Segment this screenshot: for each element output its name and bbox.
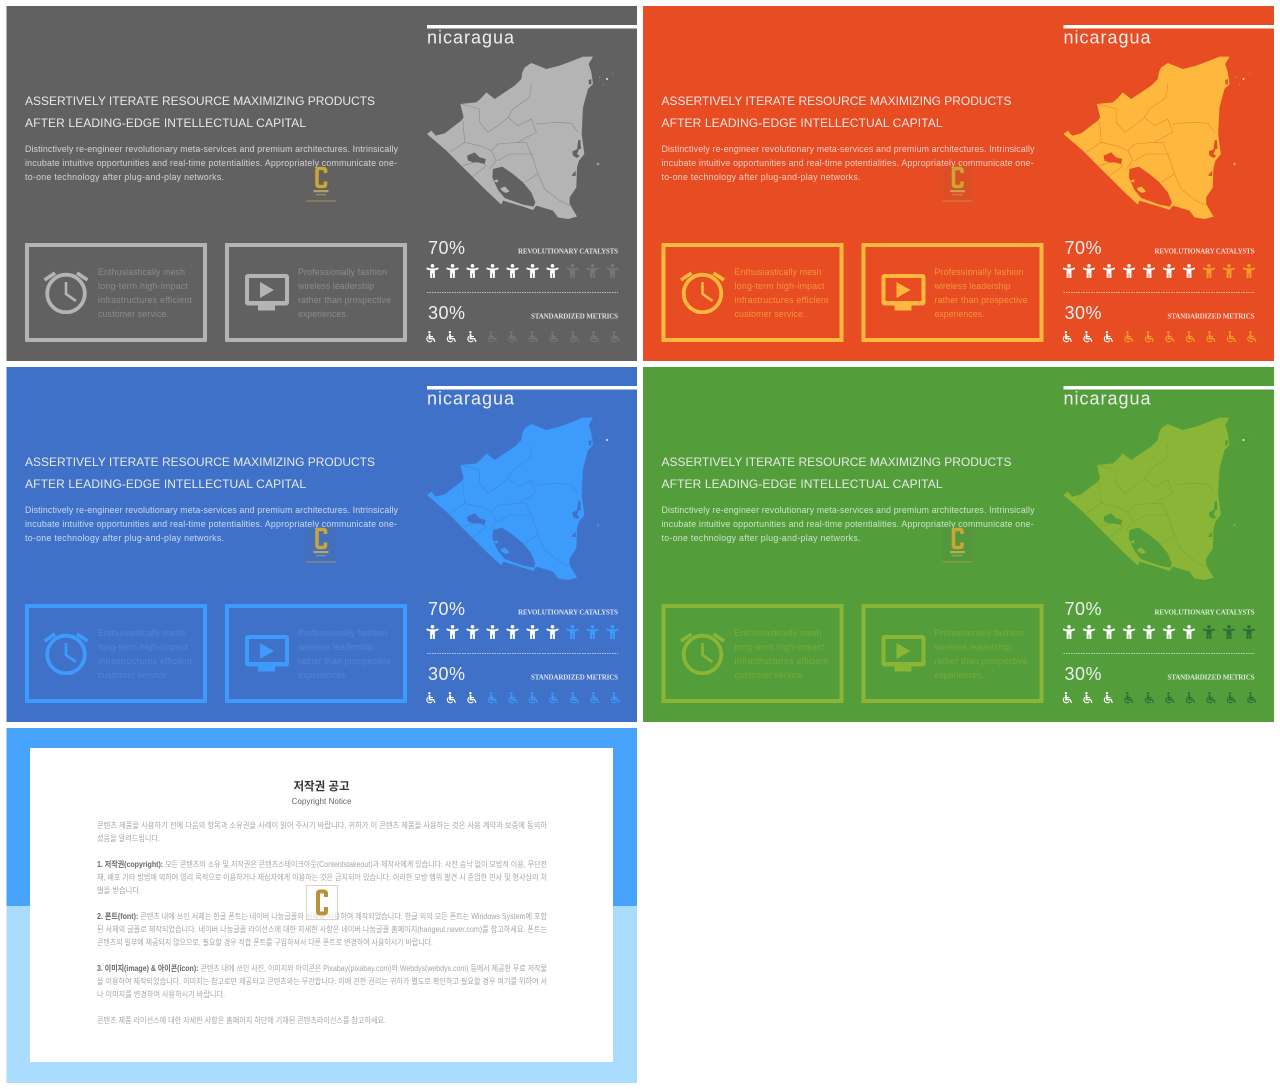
- card: clock: [27, 606, 205, 701]
- text block: clock card copy: long-term high-impact: [734, 281, 825, 291]
- icon: alarm clock: [44, 632, 88, 673]
- text block: intro: 콘텐츠 제품을 사용하기 전에 다음의 항목과 소유권을 사례이 읽어 주시기 바랍니다. 귀하가 이 콘텐츠 제품을 사용하는 것은 사용 계약과 보증에 동의하: [97, 820, 547, 830]
- heading: slide title: [25, 455, 375, 491]
- text block: description: [25, 505, 399, 543]
- heading: slide title: AFTER LEADING-EDGE INTELLECTUAL CAPITAL: [25, 116, 306, 130]
- stat: 30 percent: 30%: [428, 303, 465, 323]
- card: screen: [864, 245, 1042, 340]
- text block: screen card copy: experiences.: [298, 309, 348, 319]
- text block: screen card copy: [297, 267, 391, 319]
- text block: clock card copy: [734, 267, 829, 319]
- icon: video screen: [882, 635, 926, 672]
- stat: 70 percent: REVOLUTIONARY CATALYSTS: [518, 248, 618, 256]
- text block: description: Distinctively re-engineer revolutionary meta-services and premium architectures. Intrinsically: [25, 505, 399, 515]
- text block: clock card copy: infrastructures efficient: [734, 656, 829, 666]
- pictogram: people 7 of 10: [426, 625, 618, 639]
- pictogram: wheelchairs 3 of 10: [1063, 692, 1256, 703]
- text block: section 3 image and icon: 나 이미지를 변경하여 사용하시기 바랍니다.: [97, 989, 225, 999]
- pictogram: wheelchairs 3 of 10: [427, 692, 620, 703]
- text block: screen card copy: [297, 628, 391, 680]
- stat: 70 percent: 70%: [1064, 238, 1102, 258]
- text block: screen card copy: [934, 267, 1028, 319]
- pictogram: people 7 of 10: [426, 264, 618, 278]
- text block: section 1 copyright: [97, 859, 547, 895]
- text block: description: to-one technology after plug-and-play networks.: [662, 172, 860, 182]
- panel: blue Nicaragua slide: [6, 367, 637, 722]
- heading: notice title: 저작권 공고: [293, 779, 350, 793]
- header bar and country name: [427, 386, 637, 408]
- text block: clock card copy: Enthusiastically mesh: [734, 628, 822, 638]
- stat: 30 percent: 30%: [1064, 303, 1102, 323]
- text block: clock card copy: long-term high-impact: [98, 281, 189, 291]
- icon: alarm clock: [680, 272, 725, 312]
- text block: screen card copy: Professionally fashion: [934, 267, 1024, 277]
- text block: section 3 image and icon: [97, 963, 547, 999]
- heading: slide title: ASSERTIVELY ITERATE RESOURCE MAXIMIZING PRODUCTS: [25, 455, 375, 469]
- text block: section 3 image and icon: 을 이용하여 제작되었습니다. 이미지는 참고로만 제공되고 콘텐츠와는 무관합니다. 이에 관한 권리는 귀하가 별도로 확인하고 필요할 경우 여기를 위하여 서: [97, 976, 547, 986]
- subheading: Copyright Notice: Copyright Notice: [292, 796, 352, 806]
- text block: section 3 image and icon: 3. 이미지(image) & 아이콘(icon): 콘텐츠 내에 쓰인 사진, 이미지와 아이콘은 Pixabay(pixabay.com)와 Webdys(webdys.com) 등에서 제공한 무료 저작물: [97, 963, 547, 973]
- text block: description: Distinctively re-engineer revolutionary meta-services and premium architectures. Intrinsically: [25, 144, 399, 154]
- text block: clock card copy: customer service.: [734, 670, 806, 680]
- text block: screen card copy: rather than prospective: [934, 656, 1028, 666]
- map: Nicaragua: [427, 57, 614, 219]
- card: screen: [227, 606, 405, 701]
- text block: clock card copy: customer service.: [98, 309, 169, 319]
- text block: description: incubate intuitive opportunities and real-time potentialities. Appropriately communicate one-: [25, 158, 397, 168]
- heading: slide title: [662, 94, 1012, 130]
- heading: slide title: AFTER LEADING-EDGE INTELLECTUAL CAPITAL: [662, 477, 943, 491]
- stat: 70 percent: REVOLUTIONARY CATALYSTS: [1154, 608, 1255, 616]
- heading: slide title: [662, 455, 1012, 491]
- text block: screen card copy: rather than prospective: [298, 656, 391, 666]
- stat: 30 percent: 30%: [428, 664, 465, 684]
- icon: video screen: [245, 635, 289, 672]
- text block: screen card copy: rather than prospective: [298, 295, 391, 305]
- pictogram: people 7 of 10: [1063, 625, 1255, 639]
- text block: description: [25, 144, 399, 182]
- text block: screen card copy: wireless leadership: [934, 642, 1011, 652]
- icon: alarm clock: [44, 272, 88, 312]
- text block: screen card copy: wireless leadership: [297, 281, 374, 291]
- stat: 30 percent: [1064, 664, 1255, 684]
- panel: green Nicaragua slide: [643, 367, 1274, 722]
- panel: grey Nicaragua slide: [6, 6, 637, 361]
- icon: alarm clock: [680, 632, 725, 673]
- stat: 30 percent: STANDARDIZED METRICS: [531, 674, 618, 682]
- stat: 30 percent: 30%: [1064, 664, 1102, 684]
- stat: 30 percent: [428, 303, 618, 323]
- stat: 30 percent: [1064, 303, 1255, 323]
- stat: 70 percent: [428, 238, 618, 258]
- text block: description: Distinctively re-engineer revolutionary meta-services and premium architectures. Intrinsically: [662, 505, 1035, 515]
- stat: 30 percent: STANDARDIZED METRICS: [1168, 674, 1255, 682]
- text block: description: incubate intuitive opportunities and real-time potentialities. Appropriately communicate one-: [25, 519, 397, 529]
- stat: 70 percent: [428, 599, 618, 619]
- text block: section 1 copyright: 벌을 받습니다.: [97, 885, 141, 895]
- heading: slide title: AFTER LEADING-EDGE INTELLECTUAL CAPITAL: [25, 477, 306, 491]
- text block: screen card copy: [934, 628, 1028, 680]
- heading: slide title: ASSERTIVELY ITERATE RESOURCE MAXIMIZING PRODUCTS: [25, 94, 375, 108]
- text block: description: to-one technology after plug-and-play networks.: [25, 533, 224, 543]
- text block: screen card copy: experiences.: [934, 309, 984, 319]
- text block: clock card copy: Enthusiastically mesh: [98, 267, 185, 277]
- pictogram: wheelchairs 3 of 10: [427, 331, 620, 342]
- text block: screen card copy: Professionally fashion: [934, 628, 1024, 638]
- text block: section 1 copyright: 1. 저작권(copyright): 모든 콘텐츠의 소유 및 저작권은 콘텐츠스테이크아웃(Contentstakeout)과 제작사에게 있습니다. 사전 승낙 없이 모방적 이용, 무단전: [97, 859, 547, 869]
- text block: screen card copy: experiences.: [298, 670, 348, 680]
- card: screen: [227, 245, 405, 340]
- panel: orange Nicaragua slide: [643, 6, 1274, 361]
- text block: section 2 font: 2. 폰트(font): 콘텐츠 내에 쓰인 서체는 한글 폰트는 네이버 나눔글꼴의 서체를 사용하여 제작되었습니다. 한글 외의 모든 폰트는 Windows System에 포함: [97, 911, 547, 921]
- stat: 70 percent: 70%: [428, 599, 465, 619]
- text block: screen card copy: rather than prospective: [934, 295, 1028, 305]
- text block: description: Distinctively re-engineer revolutionary meta-services and premium architectures. Intrinsically: [662, 144, 1035, 154]
- watermark: [942, 165, 972, 203]
- card: clock: [664, 606, 842, 701]
- text block: description: to-one technology after plug-and-play networks.: [662, 533, 860, 543]
- header bar and country name: nicaragua: [1064, 28, 1151, 48]
- text block: clock card copy: [734, 628, 829, 680]
- text block: clock card copy: infrastructures efficient: [98, 295, 193, 305]
- stat: 70 percent: [1064, 599, 1255, 619]
- watermark: [306, 886, 338, 920]
- text block: section 2 font: 된 서체의 글꼴로 제작되었습니다. 네이버 나눔글꼴 라이선스에 대한 자세한 사항은 네이버 나눔글꼴 홈페이지(hangeul.naver.com)를 참고하세요. 폰트는: [97, 924, 547, 934]
- watermark: [306, 526, 336, 564]
- text block: intro: [97, 820, 547, 843]
- text block: clock card copy: Enthusiastically mesh: [734, 267, 822, 277]
- text block: closing: 콘텐츠 제품 라이선스에 대한 자세한 사항은 홈페이지 하단에 기재된 콘텐츠라이선스를 참고하세요.: [97, 1015, 386, 1025]
- text block: clock card copy: [98, 628, 193, 680]
- map: Nicaragua: [1064, 418, 1250, 580]
- watermark: [942, 526, 972, 564]
- stat: 70 percent: 70%: [428, 238, 465, 258]
- pictogram: people 7 of 10: [1063, 264, 1255, 278]
- card: clock: [664, 245, 842, 340]
- card: clock: [27, 245, 205, 340]
- panel: copyright notice: [6, 728, 637, 1083]
- text block: screen card copy: wireless leadership: [934, 281, 1011, 291]
- stat: 30 percent: STANDARDIZED METRICS: [531, 312, 618, 320]
- text block: description: incubate intuitive opportunities and real-time potentialities. Appropriately communicate one-: [662, 158, 1034, 168]
- text block: description: [662, 505, 1035, 543]
- text block: description: to-one technology after plug-and-play networks.: [25, 172, 224, 182]
- stat: 30 percent: STANDARDIZED METRICS: [1168, 312, 1255, 320]
- text block: description: [662, 144, 1035, 182]
- text block: clock card copy: long-term high-impact: [734, 642, 825, 652]
- text block: section 2 font: 콘텐츠의 일부에 제공되지 않으므로, 필요할 경우 적합 폰트를 구입하셔서 다른 폰트로 변경하여 사용하시기 바랍니다.: [97, 937, 433, 947]
- heading: slide title: AFTER LEADING-EDGE INTELLECTUAL CAPITAL: [662, 116, 943, 130]
- stat: 70 percent: REVOLUTIONARY CATALYSTS: [1154, 248, 1255, 256]
- text block: screen card copy: wireless leadership: [297, 642, 374, 652]
- header bar and country name: [1064, 386, 1274, 408]
- icon: video screen: [882, 274, 926, 310]
- text block: clock card copy: long-term high-impact: [98, 642, 189, 652]
- header bar and country name: nicaragua: [427, 388, 515, 408]
- text block: section 1 copyright: 재, 배포 기타 방법에 의하여 영리 목적으로 이용하거나 제삼자에게 이용하는 것은 금지되어 있습니다. 이러한 모방 행위 발견 시 준엄한 민사 및 형사상의 처: [97, 872, 547, 882]
- heading: slide title: ASSERTIVELY ITERATE RESOURCE MAXIMIZING PRODUCTS: [662, 455, 1012, 469]
- stat: 70 percent: [1064, 238, 1255, 258]
- card: screen: [864, 606, 1042, 701]
- map: Nicaragua: [1064, 57, 1250, 219]
- heading: slide title: ASSERTIVELY ITERATE RESOURCE MAXIMIZING PRODUCTS: [662, 94, 1012, 108]
- heading: slide title: [25, 94, 375, 130]
- text block: clock card copy: infrastructures efficient: [734, 295, 829, 305]
- pictogram: wheelchairs 3 of 10: [1063, 331, 1256, 342]
- map: Nicaragua: [427, 418, 614, 580]
- stat: 30 percent: [428, 664, 618, 684]
- text block: description: incubate intuitive opportunities and real-time potentialities. Appropriately communicate one-: [662, 519, 1034, 529]
- text block: screen card copy: Professionally fashion: [298, 628, 387, 638]
- icon: video screen: [245, 274, 289, 310]
- header bar and country name: [1064, 25, 1274, 48]
- watermark: [306, 165, 336, 203]
- text block: screen card copy: experiences.: [934, 670, 984, 680]
- stat: 70 percent: REVOLUTIONARY CATALYSTS: [518, 608, 618, 616]
- header bar and country name: nicaragua: [427, 28, 515, 48]
- header bar and country name: [427, 25, 637, 48]
- text block: clock card copy: Enthusiastically mesh: [98, 628, 185, 638]
- text block: intro: 셨음을 알려드립니다.: [97, 833, 160, 843]
- text block: clock card copy: customer service.: [734, 309, 806, 319]
- text block: clock card copy: infrastructures efficient: [98, 656, 193, 666]
- text block: section 2 font: [97, 911, 547, 947]
- text block: screen card copy: Professionally fashion: [298, 267, 387, 277]
- text block: clock card copy: customer service.: [98, 670, 169, 680]
- header bar and country name: nicaragua: [1064, 388, 1151, 408]
- text block: clock card copy: [98, 267, 193, 319]
- stat: 70 percent: 70%: [1064, 599, 1102, 619]
